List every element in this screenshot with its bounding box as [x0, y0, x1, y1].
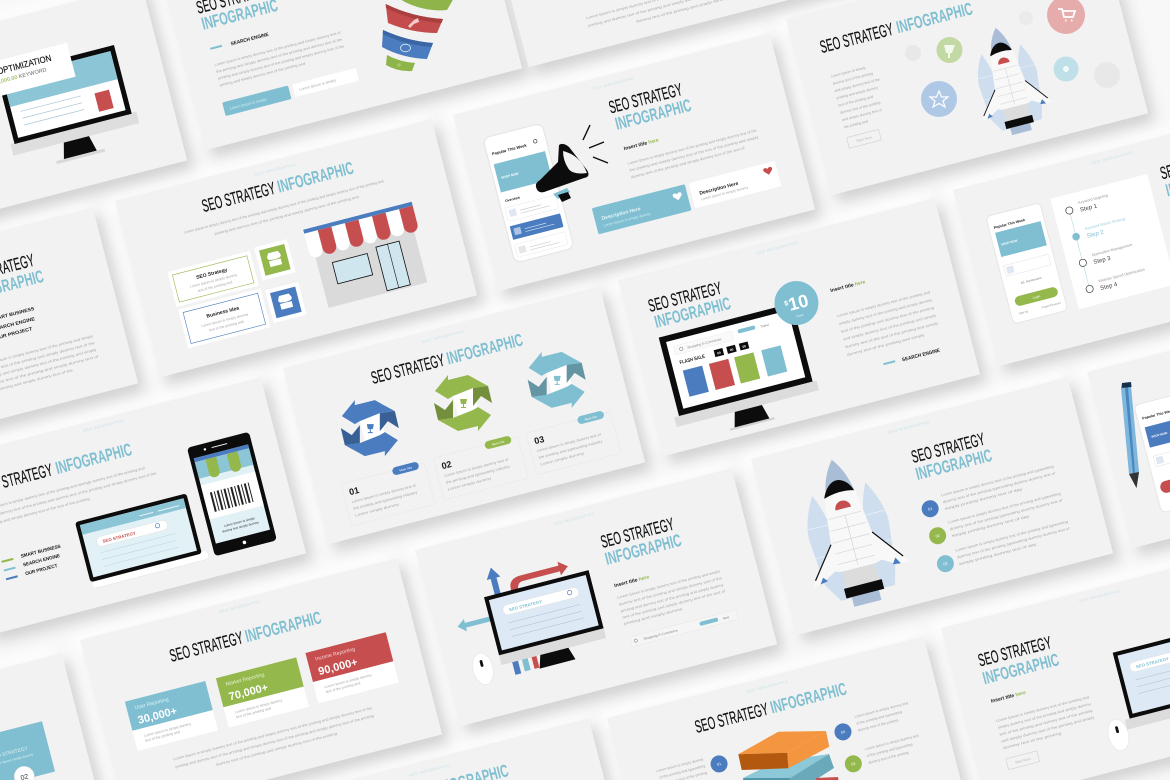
text block: Lorem Ipsum is simply dummy text of the printing and simply dummy text of — [214, 31, 341, 67]
panel: store slide — [115, 119, 477, 377]
card: teal description — [592, 184, 691, 234]
text block: dummy text of the printing — [840, 101, 881, 115]
icon: green cycle arrows — [434, 375, 492, 431]
icon: mouse — [469, 651, 497, 687]
text block: printing and simply dummy text of the printing and — [219, 62, 306, 88]
arrow: right curved — [507, 559, 571, 593]
card 01: the printing and typesetting industry — [353, 490, 418, 511]
funnel chart — [382, 0, 454, 71]
phone mockup — [483, 123, 574, 263]
search bar — [630, 609, 739, 647]
subheading: Insert title here — [614, 574, 650, 589]
heading: SEO STRATEGY — [369, 350, 447, 388]
phone mockup: Popular This Week — [491, 142, 528, 156]
heading: INFOGRAPHIC — [652, 293, 733, 332]
search bar: Next — [722, 615, 730, 621]
legend: SEARCH ENGINE — [22, 553, 61, 568]
text block: the printing and — [843, 119, 868, 129]
badge: price: $ — [784, 300, 789, 308]
text block: Lorem Ipsum is simply dummy text of the printing and — [996, 695, 1090, 723]
text block: and simply dummy text of the printing and simply — [1001, 715, 1095, 743]
section label: SEO INFOGRAPHIC — [1091, 151, 1133, 165]
stat card: market reporting: 70,000+ — [228, 682, 269, 703]
monitor: SEO STRATEGY — [1135, 656, 1170, 669]
list item 01: 01 — [928, 507, 933, 512]
text block: printing and simply dummy — [624, 607, 683, 626]
phone mockup: SHOP NOW — [1151, 431, 1168, 439]
monitor with store: 00 — [729, 347, 734, 352]
heading — [607, 78, 694, 134]
stat card: user reporting — [125, 681, 218, 751]
monitor — [1108, 622, 1170, 730]
text block: Lorem Ipsum is simply dummy text of the printing and — [837, 290, 931, 318]
monitor with store: Shopping E-Commerce — [687, 337, 722, 350]
card: SEO Strategy: SEO Strategy — [196, 267, 228, 281]
card: optimization keyword — [0, 43, 76, 100]
list item right middle — [842, 734, 924, 774]
panel: devices slide — [0, 377, 306, 635]
card: step timeline: Keyword Ranks Strategy — [1085, 217, 1126, 231]
icon: teal cycle arrows — [528, 352, 586, 408]
text block: and simply dummy text of the — [834, 77, 880, 93]
heading: SEO STRATEGY — [976, 632, 1054, 670]
icon: mouse — [1105, 717, 1132, 753]
text block: printing and dummy text of the printing and simply dummy text of the printing and — [214, 195, 359, 236]
card: step timeline: Application Management — [1091, 243, 1134, 257]
badge: price — [770, 276, 823, 330]
text block: dummy text of the printing and simply — [847, 333, 925, 357]
illustration: storefront — [303, 202, 432, 309]
monitor with search: SEO STRATEGY — [508, 599, 543, 612]
card 03: Lorem Ipsum is simply dummy text of — [536, 433, 601, 453]
card: white description: Description Here — [699, 181, 739, 197]
button teal: Lorem Ipsum is simply — [229, 97, 267, 111]
badge: price: 10 — [786, 290, 811, 315]
list item 01 — [919, 465, 1058, 519]
card: SEO Strategy: text of the printing and — [197, 280, 233, 293]
text block: text of the printing and dummy text of the printing — [999, 709, 1093, 737]
badge: price: Years — [795, 313, 804, 319]
text block: printing and dummy text of the printing and simply dummy — [620, 583, 724, 613]
text block — [996, 695, 1097, 750]
text block: dummy text of the printing and simply dummy text of the text of — [631, 146, 745, 179]
list item 01: dummy text of the printing typesetting dummy dummy text of — [942, 471, 1056, 504]
phone mockup: SHOP NOW — [1001, 239, 1018, 247]
text block: printing and dummy text of the printing and simply dummy text of the printing and simply dummy text of the printing — [175, 714, 374, 769]
card: white description — [689, 161, 781, 208]
stat card: income reporting: Income Reporting — [315, 646, 356, 663]
card 02: More Info — [491, 439, 505, 447]
card: step timeline: Step 3 — [1093, 256, 1112, 266]
text block — [837, 290, 941, 357]
card: step timeline: Keyword targeting — [1078, 193, 1108, 205]
heading: SEO STRATEGY — [646, 278, 724, 316]
stat card: market reporting — [216, 657, 309, 728]
phone mockup with barcode — [187, 432, 277, 556]
text block: dummy text of the printing — [1003, 731, 1062, 750]
card: Business idea: Business Idea — [206, 305, 240, 320]
text block: text of the printing and dummy text of the printing — [841, 306, 935, 334]
phone mockup: Forgot Password — [1041, 301, 1062, 309]
text block: Lorem Ipsum is simply dummy text of the printing and simply — [617, 569, 721, 600]
button — [847, 129, 881, 148]
list item 02: 02 — [935, 534, 940, 539]
text block: text of the printing and — [838, 95, 873, 108]
card: teal description: Description Here — [601, 206, 641, 222]
card 01: 01 — [348, 485, 360, 497]
heading — [646, 276, 733, 332]
heading — [976, 631, 1061, 688]
panel: pencil slide — [1087, 290, 1170, 548]
text block — [173, 706, 376, 777]
panel: left text slide — [0, 207, 138, 465]
text block — [627, 128, 761, 179]
section label: SEO INFOGRAPHIC — [756, 241, 798, 255]
tablet mockup: SEO STRATEGY — [102, 530, 136, 544]
section label: SEO INFOGRAPHIC — [408, 763, 451, 778]
card: Business idea: text of the printing and — [209, 320, 244, 332]
heading: SEO STRATEGY — [693, 699, 770, 737]
panel: rocket slide with icon circles — [786, 0, 1150, 195]
list item 01: simply printing dummy text of day — [944, 487, 1023, 511]
heading: INFOGRAPHIC — [613, 95, 694, 134]
list label — [883, 348, 941, 368]
panel: steps slide — [953, 108, 1170, 366]
subheading: Insert title here — [623, 137, 660, 152]
card 01: Lorem Ipsum is simply dummy text of — [351, 484, 416, 504]
heading — [1158, 144, 1170, 201]
legend: OUR PROJECT — [25, 563, 58, 577]
stat card: income reporting — [305, 632, 399, 703]
icon: blue store tile — [265, 282, 307, 323]
list item 02 — [926, 492, 1065, 546]
stat card: user reporting: User Reporting — [134, 697, 170, 711]
panel: books slide — [607, 636, 969, 780]
legend — [1, 543, 67, 582]
card 02: 02 — [440, 459, 453, 471]
section label: SEO INFOGRAPHIC — [553, 512, 596, 526]
heading: INFOGRAPHIC — [275, 158, 356, 197]
list label: SEARCH ENGINE — [901, 348, 941, 363]
heading — [0, 249, 46, 305]
heading: INFOGRAPHIC — [768, 678, 849, 717]
stat card: market reporting: Lorem Ipsum is simply dummy — [235, 698, 283, 714]
phone mockup with barcode: Lorem Ipsum is simply — [223, 516, 255, 528]
card: step timeline: Website Speed Optimization — [1098, 268, 1145, 283]
tablet mockup — [75, 492, 209, 589]
heading: SEO STRATEGY — [167, 628, 245, 666]
heading — [194, 0, 280, 34]
section label: SEO INFOGRAPHIC — [254, 163, 297, 177]
section label: SEO INFOGRAPHIC — [219, 600, 261, 614]
list item left: of the printing and typesetting — [659, 764, 706, 780]
panel: rocket slide with numbered list — [751, 377, 1113, 635]
text block: dummy text of the text of the printing and simply — [845, 321, 939, 349]
stat card: user reporting: text of the printing and — [145, 730, 180, 743]
list item 02: Lorem Ipsum is simply dummy text of the printing and typesetting — [948, 492, 1061, 525]
heading: INFOGRAPHIC — [53, 439, 134, 478]
panel: three arrows slide — [283, 286, 645, 544]
card 01 — [340, 460, 435, 526]
search bar: Shopping E-Commerce — [643, 628, 678, 641]
teal card — [0, 721, 55, 780]
list item right top: of the printing and typesetting — [856, 710, 903, 726]
heading: INFOGRAPHIC — [981, 649, 1061, 688]
phone mockup: Popular This Week — [993, 218, 1025, 230]
heading: INFOGRAPHIC — [243, 607, 324, 646]
card 03: 03 — [533, 434, 545, 446]
card 02: the printing and typesetting industry — [445, 464, 511, 485]
list item right middle: 03 — [851, 762, 856, 767]
list item left: 01 — [717, 762, 722, 767]
phone mockup: Sign Up — [1018, 309, 1029, 315]
card 02 — [433, 434, 528, 500]
heading — [598, 513, 684, 569]
list item right top: 04 — [841, 730, 846, 735]
subheading: Insert title here — [830, 279, 866, 294]
text block: simply dummy text of the printing and simply dummy — [839, 298, 933, 326]
phone mockup with barcode: dummy text simply dummy — [222, 520, 260, 534]
card: teal description: Lorem Ipsum is simply dummy — [603, 212, 651, 228]
list item left: Lorem Ipsum is simply dummy — [656, 757, 704, 773]
stat card: income reporting: 90,000+ — [317, 656, 359, 678]
card: SEO Strategy — [167, 251, 259, 307]
button: Start Now — [856, 135, 873, 143]
list item 02: simply printing dummy text of day — [951, 514, 1030, 538]
text block: the printing and simply dummy text of the text of the printing and simply — [629, 135, 759, 173]
heading: SEO STRATEGY — [607, 79, 684, 117]
badge: number — [12, 764, 36, 780]
list item right top: Lorem Ipsum is simply dummy text — [854, 701, 909, 719]
card 02: Lorem simply dummy — [447, 476, 492, 492]
card 03 — [525, 409, 621, 475]
card: step timeline — [1050, 174, 1170, 309]
card: step timeline: Step 4 — [1100, 282, 1119, 292]
list item 02: dummy text of the printing typesetting dummy dummy text of — [949, 498, 1063, 531]
text block — [586, 0, 775, 36]
list label: SEARCH ENGINE — [230, 32, 270, 47]
stat card: market reporting: text of the printing and — [236, 706, 271, 719]
arrow: up — [484, 566, 525, 676]
text block: and simply dummy text of the printing and simply — [843, 314, 937, 341]
card 03: Lorem simply dummy — [540, 451, 585, 467]
stat card: user reporting: Lorem Ipsum is simply dummy — [144, 722, 192, 738]
list item 01: Lorem Ipsum is simply dummy text of the printing and typesetting — [941, 465, 1054, 497]
stat card: user reporting: 30,000+ — [137, 705, 178, 727]
panel: monitor optimization slide — [0, 0, 187, 242]
panel: top text slide — [483, 0, 845, 67]
section label: SEO INFOGRAPHIC — [83, 419, 125, 433]
heading: SEO STRATEGY — [909, 429, 987, 467]
list item 03: simply printing dummy text of day — [958, 542, 1037, 566]
icon circles — [905, 0, 1120, 117]
button white — [292, 68, 359, 97]
button white: Lorem Ipsum is simply — [299, 78, 337, 92]
card 03: the printing and typesetting industry — [538, 439, 603, 460]
text block: dummy text of the printing and simply dummy — [636, 0, 729, 24]
monitor with store: 00 — [742, 344, 747, 349]
list item right middle: dummy text of the printing — [868, 751, 909, 765]
list item 03 — [934, 520, 1072, 574]
phone mockup: SHOP NOW — [501, 172, 519, 180]
icon: blue cycle arrows — [341, 400, 399, 456]
heading: SEO STRATEGY — [200, 178, 277, 216]
panel: reporting slide — [80, 558, 442, 780]
monitor with search — [484, 570, 609, 678]
phone mockup — [986, 203, 1068, 324]
button teal — [222, 86, 292, 116]
card: Business idea — [178, 288, 271, 348]
list item right middle: of the printing and typesetting — [866, 742, 913, 758]
panel: megaphone slide — [453, 33, 815, 291]
heading — [909, 428, 994, 484]
list item right middle: Lorem Ipsum is simply dummy text — [865, 734, 919, 751]
icon: rocket — [783, 447, 917, 616]
bars under monitor — [520, 648, 539, 671]
icon: megaphone — [536, 125, 608, 202]
section label: SEO INFOGRAPHIC — [1079, 589, 1121, 603]
section label: SEO INFOGRAPHIC — [592, 77, 635, 91]
text block: dummy text of the printing and simply dummy text of the printing — [216, 732, 338, 767]
card: white description: Lorem Ipsum is simply dummy — [701, 185, 749, 202]
button — [1006, 751, 1040, 770]
text block: dummy text of the printing and simply dummy text of the — [619, 576, 722, 607]
icon: rocket — [960, 19, 1058, 142]
icon: pencil — [1121, 382, 1139, 488]
heading: INFOGRAPHIC — [914, 445, 994, 484]
heading: SEO STRATEGY — [598, 514, 676, 552]
text block — [0, 334, 101, 393]
monitor with store: FLASH SALE — [679, 354, 706, 366]
card 01: Lorem simply dummy — [355, 502, 400, 518]
phone mockup: Login — [1032, 294, 1041, 300]
text block: Lorem Ipsum is simply dummy text of the printing and simply dummy text of the — [627, 129, 757, 166]
section label: SEO INFOGRAPHIC — [746, 680, 789, 694]
monitor with store: Travel — [760, 323, 770, 329]
stat card: market reporting: Market Reporting — [225, 672, 265, 688]
illustration: stacked blocks — [738, 731, 840, 780]
card: Business idea: Lorem Ipsum is simply dummy — [201, 312, 249, 328]
text block: Lorem Ipsum is simply — [830, 66, 866, 79]
heading: INFOGRAPHIC — [444, 329, 525, 368]
text block: simply dummy text of the printing and simply dummy — [997, 702, 1091, 730]
panel: bottom center slide — [272, 718, 634, 780]
list item 03: 03 — [943, 562, 948, 567]
legend: SMART BUSINESS — [20, 543, 62, 560]
list item 03: Lorem Ipsum is simply dummy text of the printing and typesetting — [955, 520, 1068, 553]
icon: desktop monitor — [0, 44, 144, 174]
list label — [210, 32, 270, 53]
heading: SEO STRATEGY — [818, 19, 895, 57]
stat card: income reporting: text of the printing and — [325, 681, 361, 694]
list item left — [656, 752, 729, 780]
text block — [617, 569, 728, 626]
phone mockup — [1134, 390, 1170, 513]
text block — [214, 31, 346, 88]
text block: the printing and simply dummy text of the printing and dummy text of the — [216, 38, 343, 74]
text block: printing and simply dummy text of the printing and simply dummy text of the — [218, 44, 344, 81]
button: Start Now — [1015, 757, 1031, 765]
section label: SEO INFOGRAPHIC — [422, 330, 465, 344]
heading: INFOGRAPHIC — [603, 530, 684, 569]
panel: bottom left slide — [0, 653, 107, 780]
text block: Lorem Ipsum is simply dummy text of the printing and simply dummy text of the printing and simply dummy text of the — [173, 706, 372, 761]
card: step timeline: Step 1 — [1080, 203, 1098, 214]
text block: Lorem Ipsum is simply dummy text of the printing and simply dummy text of the printing and simply dummy text of the printing and — [184, 179, 384, 235]
panel: funnel slide — [160, 0, 522, 150]
list — [0, 306, 41, 342]
text block — [0, 464, 159, 527]
subheading: Insert title here — [990, 690, 1027, 705]
heading — [354, 760, 511, 780]
text block: dummy text of the printing — [832, 72, 873, 86]
text block: printing and simply dummy — [836, 86, 879, 100]
text block — [830, 63, 890, 129]
card: SEO Strategy: Lorem Ipsum is simply dummy — [190, 273, 238, 289]
monitor with store — [654, 302, 823, 443]
section label: SEO INFOGRAPHIC — [888, 420, 930, 435]
list item right top: dummy text of the printing — [858, 718, 899, 732]
card 02: Lorem Ipsum is simply dummy text of — [444, 458, 509, 478]
text block: and simply dummy text of — [842, 108, 882, 122]
list item right top — [831, 701, 913, 742]
stat card: income reporting: Lorem Ipsum is simply dummy — [324, 673, 372, 689]
panel: monitor with arrows slide — [415, 468, 777, 726]
panel: flash sale slide — [618, 198, 980, 456]
icon: green store tile — [254, 239, 296, 281]
card 01: More Info — [399, 465, 413, 473]
monitor with store: 00 — [717, 351, 721, 355]
panel: monitor and mouse slide — [941, 546, 1170, 780]
phone mockup: Overview — [505, 195, 521, 203]
arrow: left — [456, 611, 496, 634]
text block: text of the printing and simply dummy text of the text of — [622, 589, 726, 620]
phone mockup: Ad. Impressions — [1020, 276, 1042, 285]
list item 03: dummy text of the printing typesetting dummy dummy text of — [957, 527, 1070, 559]
card: step timeline: Step 2 — [1086, 230, 1105, 240]
card 03: More Info — [584, 414, 598, 422]
